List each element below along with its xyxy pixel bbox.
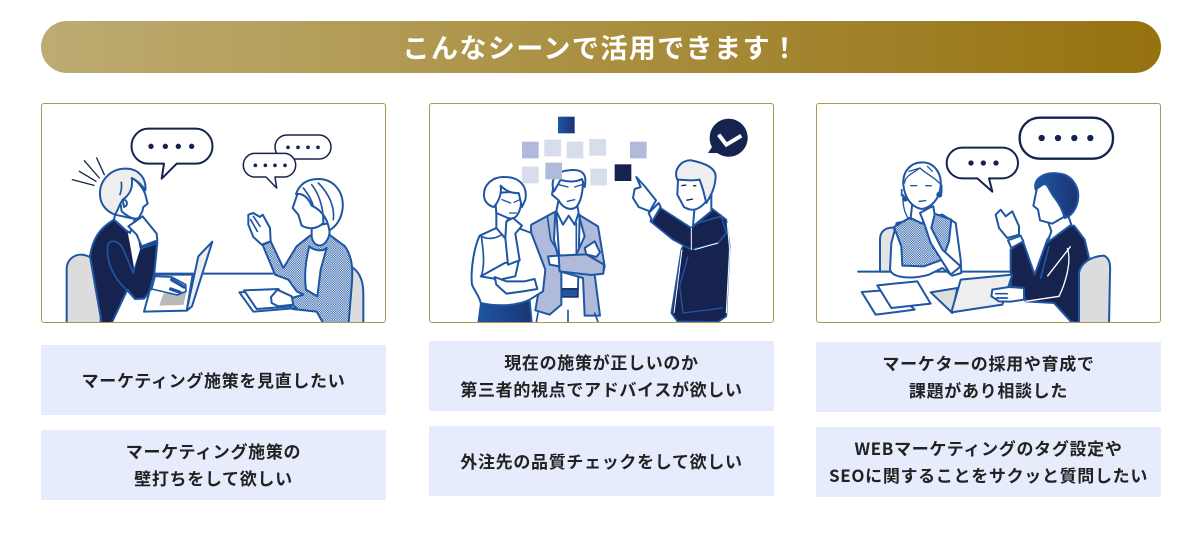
man at laptop (90, 169, 157, 323)
papers (862, 281, 931, 315)
speech bubble: large (1020, 118, 1113, 159)
woman thinking (472, 177, 545, 326)
man in grey jacket (531, 163, 605, 322)
title (41, 21, 1161, 73)
text block: scene 2 need 1: 現在の施策が正しいのか (504, 349, 699, 374)
speech bubble: large (132, 129, 212, 179)
text block: scene 2 need 2 (429, 426, 774, 496)
chair right (347, 266, 363, 326)
text block: scene 2 need 2: 外注先の品質チェックをして欲しい (460, 448, 743, 472)
text block: scene 1 need 1: マーケティング施策を見直したい (82, 366, 345, 392)
panel: scene 3 illustration (816, 103, 1161, 323)
speech bubbles: pair (243, 135, 331, 188)
text block: scene 1 need 1 (41, 345, 386, 415)
table line (153, 271, 273, 277)
panel: scene 1 illustration (41, 103, 386, 323)
text block: scene 1 need 2 (41, 430, 386, 500)
text block: scene 1 need 2: 壁打ちをして欲しい (134, 465, 293, 490)
chair back (880, 228, 901, 272)
text block: scene 3 need 1: 課題があり相談した (909, 377, 1068, 402)
chair right (1079, 256, 1110, 326)
speech bubble: small (947, 148, 1018, 192)
laptop (931, 275, 1024, 313)
panel: scene 2 illustration (429, 103, 774, 323)
icon: check badge (708, 119, 748, 157)
man talking (996, 173, 1089, 323)
text block: scene 1 need 2: マーケティング施策の (126, 438, 301, 463)
text block: scene 3 need 2: SEOに関することをサクッと質問したい (829, 462, 1148, 487)
text block: scene 3 need 2 (816, 427, 1161, 497)
table line (857, 269, 1021, 275)
title: こんなシーンで活用できます！ (403, 27, 799, 66)
text block: scene 3 need 1: マーケターの採用や育成で (882, 350, 1095, 375)
text block: scene 3 need 2: WEBマーケティングのタグ設定や (854, 435, 1123, 460)
notebook (239, 289, 297, 312)
laptop left (144, 242, 212, 312)
chair left (67, 255, 101, 326)
woman with headset (890, 162, 961, 277)
man pointing (633, 160, 730, 322)
woman with jacket (248, 179, 352, 326)
text block: scene 2 need 1: 第三者的視点でアドバイスが欲しい (460, 376, 743, 401)
text block: scene 2 need 1 (429, 341, 774, 411)
text block: scene 3 need 1 (816, 342, 1161, 412)
icon: squares grid (522, 117, 647, 185)
icon: surprise lines (72, 158, 104, 185)
